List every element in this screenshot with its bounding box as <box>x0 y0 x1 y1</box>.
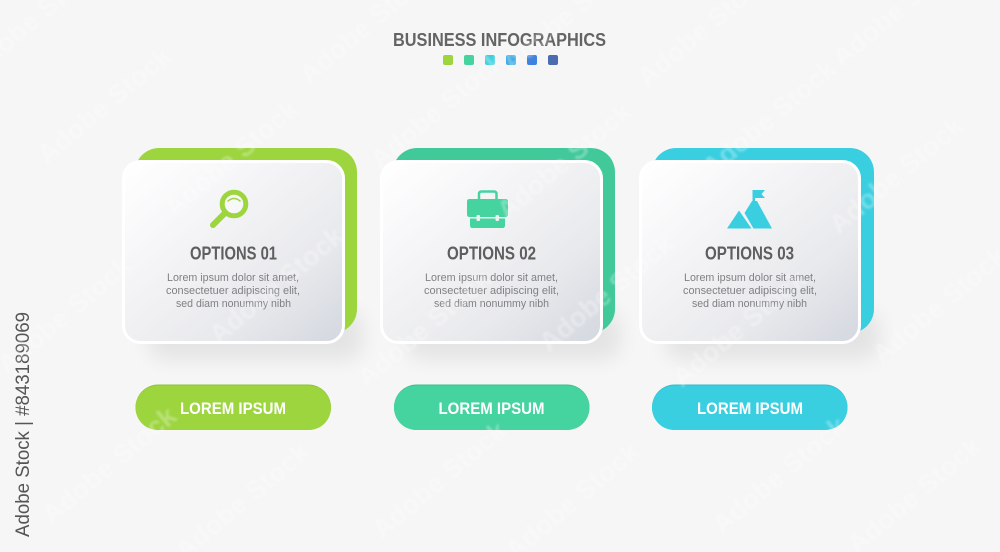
body text: Lorem ipsum dolor sit amet, <box>425 272 558 284</box>
icon: magnifier <box>213 192 246 225</box>
watermarks: Adobe Stock <box>158 93 305 223</box>
front card <box>640 162 860 342</box>
watermarks: Adobe Stock <box>706 410 853 540</box>
button: lorem ipsum cyan: LOREM IPSUM <box>697 399 803 418</box>
back plate cyan <box>652 148 874 333</box>
watermarks: Adobe Stock <box>666 263 813 393</box>
panel: options 03 <box>640 148 880 360</box>
watermarks: Adobe Stock <box>823 110 970 240</box>
watermarks: Adobe Stock <box>696 53 843 183</box>
button: lorem ipsum teal <box>394 384 590 430</box>
front card <box>124 162 344 342</box>
stock id vertical text: Adobe Stock | #843189069 <box>13 312 34 537</box>
body text: Lorem ipsum dolor sit amet, <box>684 272 816 284</box>
body text: sed diam nonummy nibh <box>692 298 807 310</box>
body text <box>166 272 300 310</box>
watermarks: Adobe Stock <box>31 40 178 170</box>
body text: consectetuer adipiscing elit, <box>166 285 300 297</box>
watermarks: Adobe Stock <box>366 415 513 545</box>
front card <box>382 162 602 342</box>
button: lorem ipsum cyan <box>652 384 848 430</box>
watermarks: Adobe Stock <box>351 263 498 393</box>
title: BUSINESS INFOGRAPHICS <box>393 30 606 50</box>
watermarks: Adobe Stock <box>203 220 350 350</box>
body text <box>683 272 817 310</box>
body text <box>424 272 559 310</box>
heading: OPTIONS 01 <box>190 244 277 264</box>
watermarks: Adobe Stock <box>533 228 680 358</box>
heading: OPTIONS 02 <box>447 244 536 264</box>
watermarks: Adobe Stock <box>36 400 183 530</box>
panel: options 02 <box>382 148 621 360</box>
watermarks: Adobe Stock <box>491 96 638 226</box>
icon: mountain with flag <box>727 190 772 228</box>
back plate green <box>135 148 357 333</box>
icon: briefcase <box>467 192 508 228</box>
body text: sed diam nonummy nibh <box>434 298 549 310</box>
body text: sed diam nonummy nibh <box>176 298 291 310</box>
watermarks: Adobe Stock <box>364 45 511 175</box>
back plate teal <box>393 148 615 333</box>
panel: options 01 <box>124 148 363 360</box>
button: lorem ipsum green: LOREM IPSUM <box>180 399 286 418</box>
body text: consectetuer adipiscing elit, <box>424 285 559 297</box>
button: lorem ipsum green <box>136 384 331 430</box>
button: lorem ipsum teal: LOREM IPSUM <box>438 399 544 418</box>
heading: OPTIONS 03 <box>705 244 794 264</box>
body text: consectetuer adipiscing elit, <box>683 285 817 297</box>
colour dots row <box>443 55 558 65</box>
body text: Lorem ipsum dolor sit amet, <box>167 272 299 284</box>
